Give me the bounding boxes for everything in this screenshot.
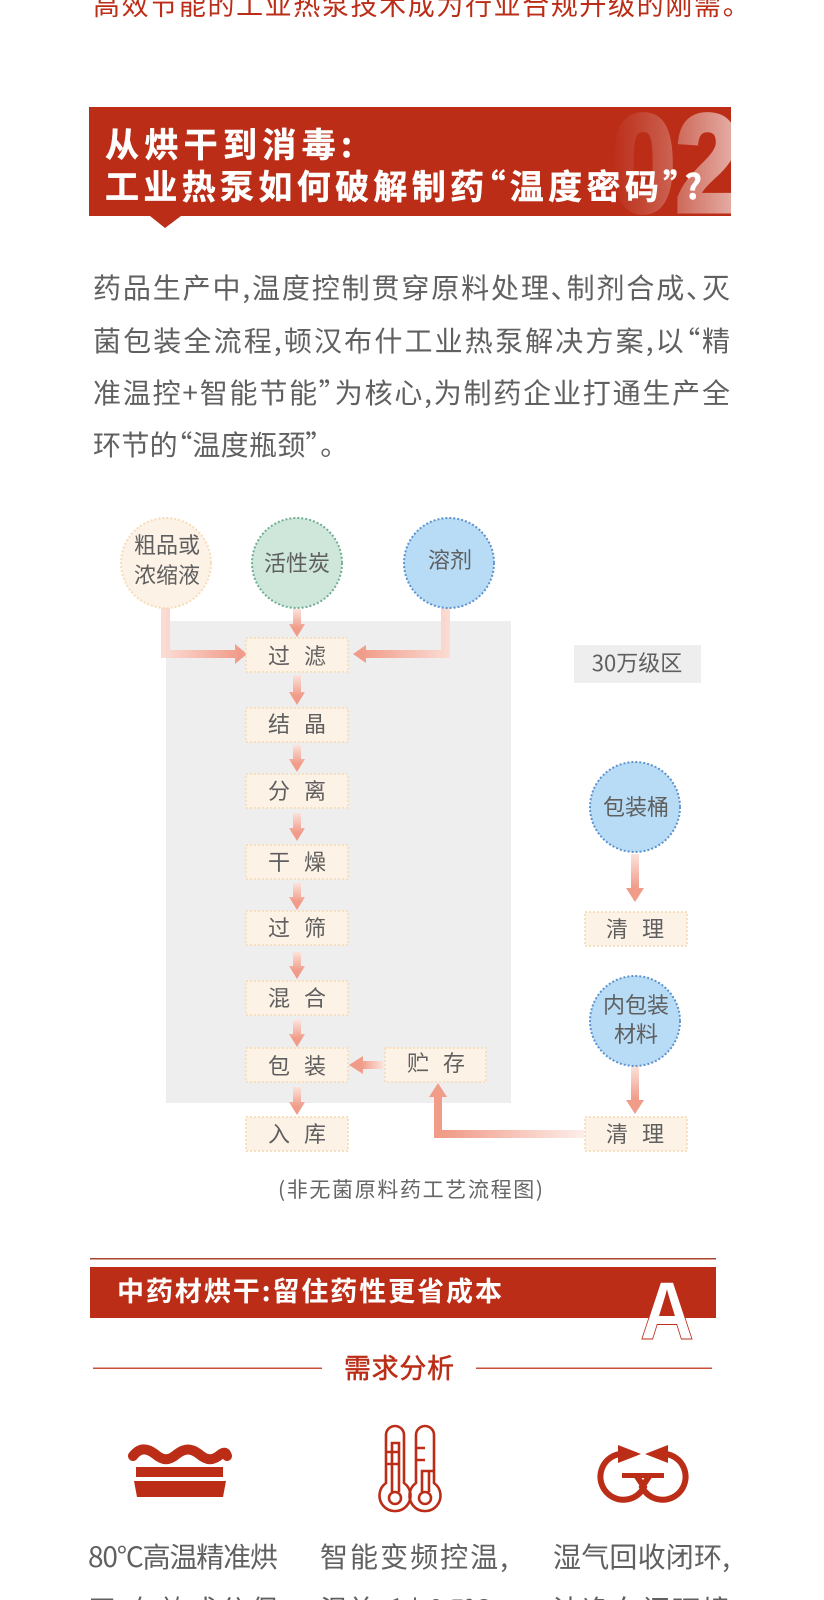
circle: 内包装材料	[590, 976, 680, 1066]
feature text: column 1	[88, 1536, 278, 1600]
big number 02	[620, 112, 731, 215]
icon: thermometers	[380, 1426, 440, 1511]
process boxes: 干燥	[268, 845, 340, 877]
subheading: 需求分析: 需求分析	[344, 1347, 454, 1386]
process boxes: 包装	[268, 1049, 340, 1081]
paragraph: 准温控+智能节能”为核心,为制药企业打通生产全	[93, 372, 730, 412]
section A header	[90, 1258, 716, 1357]
process boxes: 清理	[606, 1117, 678, 1149]
circle: 粗品或浓缩液	[121, 518, 211, 608]
icon: closed-loop recycling	[600, 1445, 686, 1500]
feature text: column 3: 湿气回收闭环,	[553, 1536, 730, 1576]
arrows	[161, 608, 644, 1138]
process boxes: 结晶	[268, 707, 340, 739]
process boxes: 入库	[268, 1117, 340, 1149]
feature text: column 2: 智能变频控温,	[320, 1536, 508, 1576]
process boxes	[246, 638, 687, 1151]
label: 30万级区	[574, 645, 701, 683]
flow chart	[121, 518, 701, 1151]
paragraph	[93, 267, 730, 464]
circle: 溶剂	[404, 518, 494, 608]
flow chart caption: (非无菌原料药工艺流程图)	[278, 1174, 543, 1204]
circle: 溶剂: 溶剂	[428, 543, 472, 575]
label: 30万级区: 30万级区	[592, 646, 682, 678]
circle: 粗品或浓缩液: 粗品或	[134, 528, 200, 560]
icon: drying tray with heat wave	[133, 1449, 227, 1497]
feature text: column 3	[553, 1536, 730, 1600]
process boxes: 混合	[268, 981, 340, 1013]
circle: 内包装材料: 内包装	[603, 988, 669, 1020]
process boxes: 清理	[606, 912, 678, 944]
process boxes: 贮存	[407, 1046, 479, 1078]
banner shape	[89, 107, 731, 228]
feature text: column 1: 80°C高温精准烘	[88, 1536, 278, 1576]
paragraph: 菌包装全流程,顿汉布什工业热泵解决方案,以“精	[93, 320, 730, 360]
circle: 包装桶: 包装桶	[603, 790, 669, 822]
paragraph: 环节的“温度瓶颈”。	[93, 424, 334, 464]
panel: gray clean zone	[166, 621, 511, 1103]
process boxes: 分离	[268, 774, 340, 806]
process boxes: 过滤	[268, 639, 340, 671]
banner title: 从烘干到消毒:	[105, 118, 352, 167]
feature text: column 2	[320, 1536, 508, 1600]
circle: 包装桶	[590, 762, 680, 852]
paragraph: 药品生产中,温度控制贯穿原料处理、制剂合成、灭	[93, 267, 730, 307]
circle: 粗品或浓缩液: 浓缩液	[134, 558, 200, 590]
section banner 02	[89, 107, 731, 228]
banner title: 工业热泵如何破解制药“温度密码”?	[105, 160, 702, 209]
circle: 内包装材料: 材料	[614, 1017, 658, 1049]
banner title	[105, 118, 702, 209]
input circles	[121, 518, 680, 1066]
letter A: A	[640, 1264, 694, 1357]
circle: 活性炭: 活性炭	[264, 546, 330, 578]
circle: 活性炭	[252, 518, 342, 608]
process boxes: 过筛	[268, 911, 340, 943]
section title: 中药材烘干:留住药性更省成本	[117, 1270, 502, 1309]
